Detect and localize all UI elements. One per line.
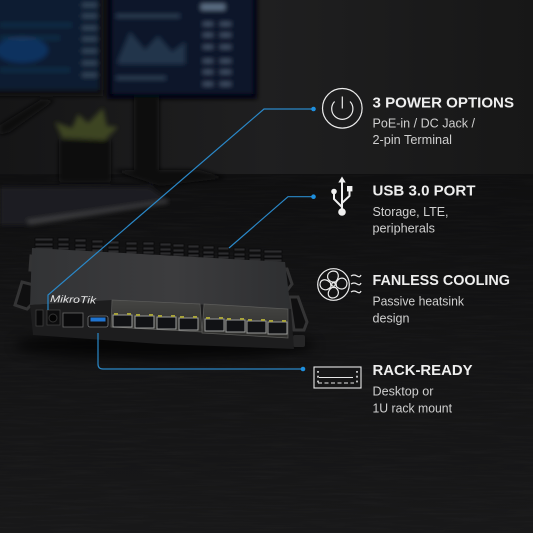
desk surface — [0, 174, 533, 533]
port LEDs — [114, 313, 286, 322]
keyboard — [0, 187, 168, 225]
brand logo: MikroTik — [50, 294, 97, 307]
left port shroud — [111, 300, 202, 332]
power switch — [36, 310, 43, 326]
feature text: USB — [372, 182, 476, 236]
feature text: cooling: Passive heatsink — [372, 295, 465, 309]
feature text: cooling: FANLESS COOLING — [372, 272, 510, 289]
feature text: cooling: design — [372, 312, 410, 326]
USB port — [88, 316, 108, 327]
leader line: rack — [98, 333, 305, 371]
ethernet ports — [113, 315, 287, 334]
leader line: power — [48, 107, 316, 310]
top plate — [30, 248, 291, 312]
router — [15, 238, 307, 349]
left monitor — [0, 0, 103, 96]
feature text: rack — [372, 362, 472, 415]
feature text: power: 3 POWER OPTIONS — [372, 94, 514, 111]
icon: rack — [314, 367, 361, 388]
feature text: rack: RACK-READY — [372, 362, 472, 379]
icon: USB — [331, 176, 352, 216]
front face — [30, 300, 294, 349]
icon: fan cooling — [318, 269, 361, 300]
plant — [55, 108, 118, 182]
DC jack — [47, 310, 60, 325]
right monitor — [107, 0, 257, 99]
router shadow — [15, 331, 315, 359]
feature text: cooling — [372, 272, 510, 326]
feature text: power — [372, 94, 514, 147]
blurred desk scene — [0, 0, 257, 225]
heatsink fins — [35, 238, 282, 262]
leader line: USB — [229, 194, 316, 248]
feature text: rack: 1U rack mount — [372, 401, 453, 415]
feature text: power: PoE-in / DC Jack / — [372, 116, 476, 130]
right port shroud — [202, 304, 288, 338]
feature text: rack: Desktop or — [372, 385, 434, 399]
feature text: USB: USB 3.0 PORT — [372, 182, 476, 199]
feature text: USB: peripherals — [372, 222, 435, 236]
monitor arm and stand — [0, 98, 226, 186]
feature text: power: 2-pin Terminal — [372, 133, 452, 147]
mounting ears — [15, 256, 307, 347]
icon: power — [322, 88, 362, 128]
feature text: USB: Storage, LTE, — [372, 205, 448, 219]
SFP cage — [63, 313, 83, 327]
background wall — [0, 0, 533, 190]
desk wood grain — [0, 174, 533, 533]
